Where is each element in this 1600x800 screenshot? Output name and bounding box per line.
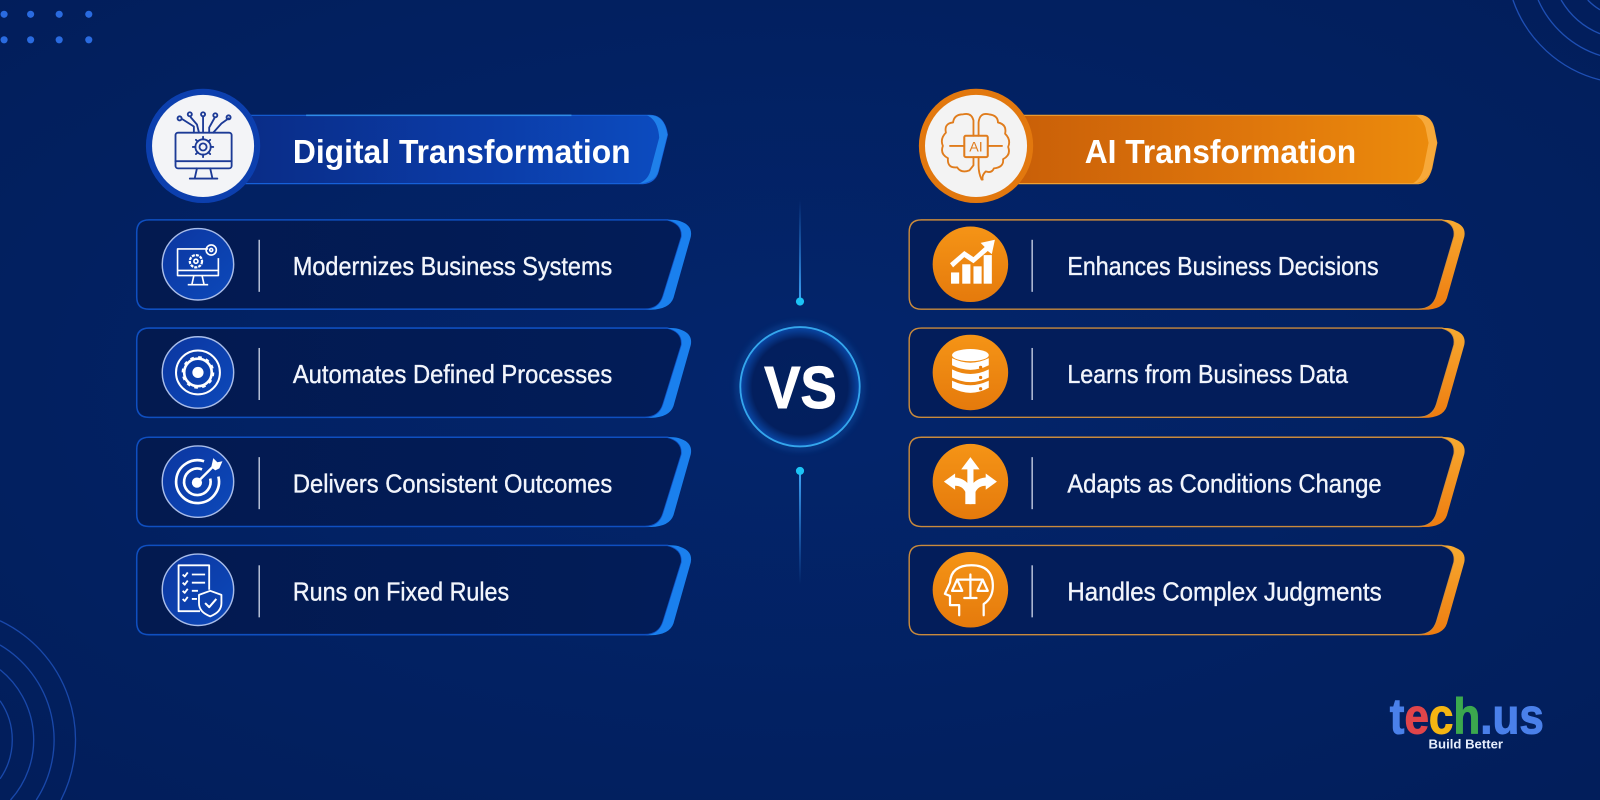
divider xyxy=(258,457,260,509)
icon: three-way arrows xyxy=(933,444,1008,519)
icon: ai brain: AI xyxy=(969,140,983,156)
card: automates defined processes xyxy=(137,328,691,418)
icon: ai brain xyxy=(919,89,1033,203)
label: Learns from Business Data xyxy=(1067,361,1349,389)
label: Automates Defined Processes xyxy=(293,361,612,389)
panel: digital transformation xyxy=(137,89,691,635)
card: runs on fixed rules xyxy=(137,545,691,635)
decoration: rings top right xyxy=(1513,0,1600,80)
card: modernizes business systems xyxy=(137,220,691,310)
decoration: dot grid top left xyxy=(1,11,92,43)
icon: rising chart xyxy=(933,227,1008,302)
icon: checklist with shield xyxy=(162,554,234,626)
logo tagline: Build Better xyxy=(1429,736,1503,751)
divider xyxy=(1031,240,1033,292)
divider xyxy=(1031,565,1033,617)
card: enhances business decisions xyxy=(909,220,1465,310)
card: learns from business data xyxy=(909,328,1465,418)
label: Modernizes Business Systems xyxy=(293,253,612,281)
divider xyxy=(1031,348,1033,400)
vs badge xyxy=(739,326,861,448)
card: adapts as conditions change xyxy=(909,437,1465,527)
vs divider xyxy=(739,200,861,584)
icon: head with scales xyxy=(933,552,1008,628)
icon: gear ring xyxy=(162,337,234,408)
label: Enhances Business Decisions xyxy=(1067,253,1379,281)
heading text: AI Transformation xyxy=(1085,134,1356,171)
divider xyxy=(258,240,260,292)
panel: ai transformation xyxy=(909,89,1465,635)
icon: monitor with gears xyxy=(162,229,234,300)
card: delivers consistent outcomes xyxy=(137,437,691,527)
label: Delivers Consistent Outcomes xyxy=(293,470,612,498)
icon: monitor with circuit xyxy=(146,89,260,203)
divider xyxy=(258,565,260,617)
heading banner: ai transformation xyxy=(1014,115,1437,184)
icon: target with arrow xyxy=(162,446,234,517)
label: Handles Complex Judgments xyxy=(1067,579,1382,607)
label: Runs on Fixed Rules xyxy=(293,579,509,607)
heading text: Digital Transformation xyxy=(293,134,631,171)
connector line: bottom xyxy=(796,467,804,584)
connector line: top xyxy=(796,200,804,306)
decoration: rings bottom left xyxy=(0,621,76,800)
card: handles complex judgments xyxy=(909,545,1465,635)
icon: database xyxy=(933,335,1008,410)
heading banner: digital transformation xyxy=(241,115,667,184)
vs badge: VS xyxy=(764,354,837,421)
divider xyxy=(1031,457,1033,509)
divider xyxy=(258,348,260,400)
logo: tech.us: tech.us xyxy=(1390,689,1544,745)
label: Adapts as Conditions Change xyxy=(1067,470,1382,498)
